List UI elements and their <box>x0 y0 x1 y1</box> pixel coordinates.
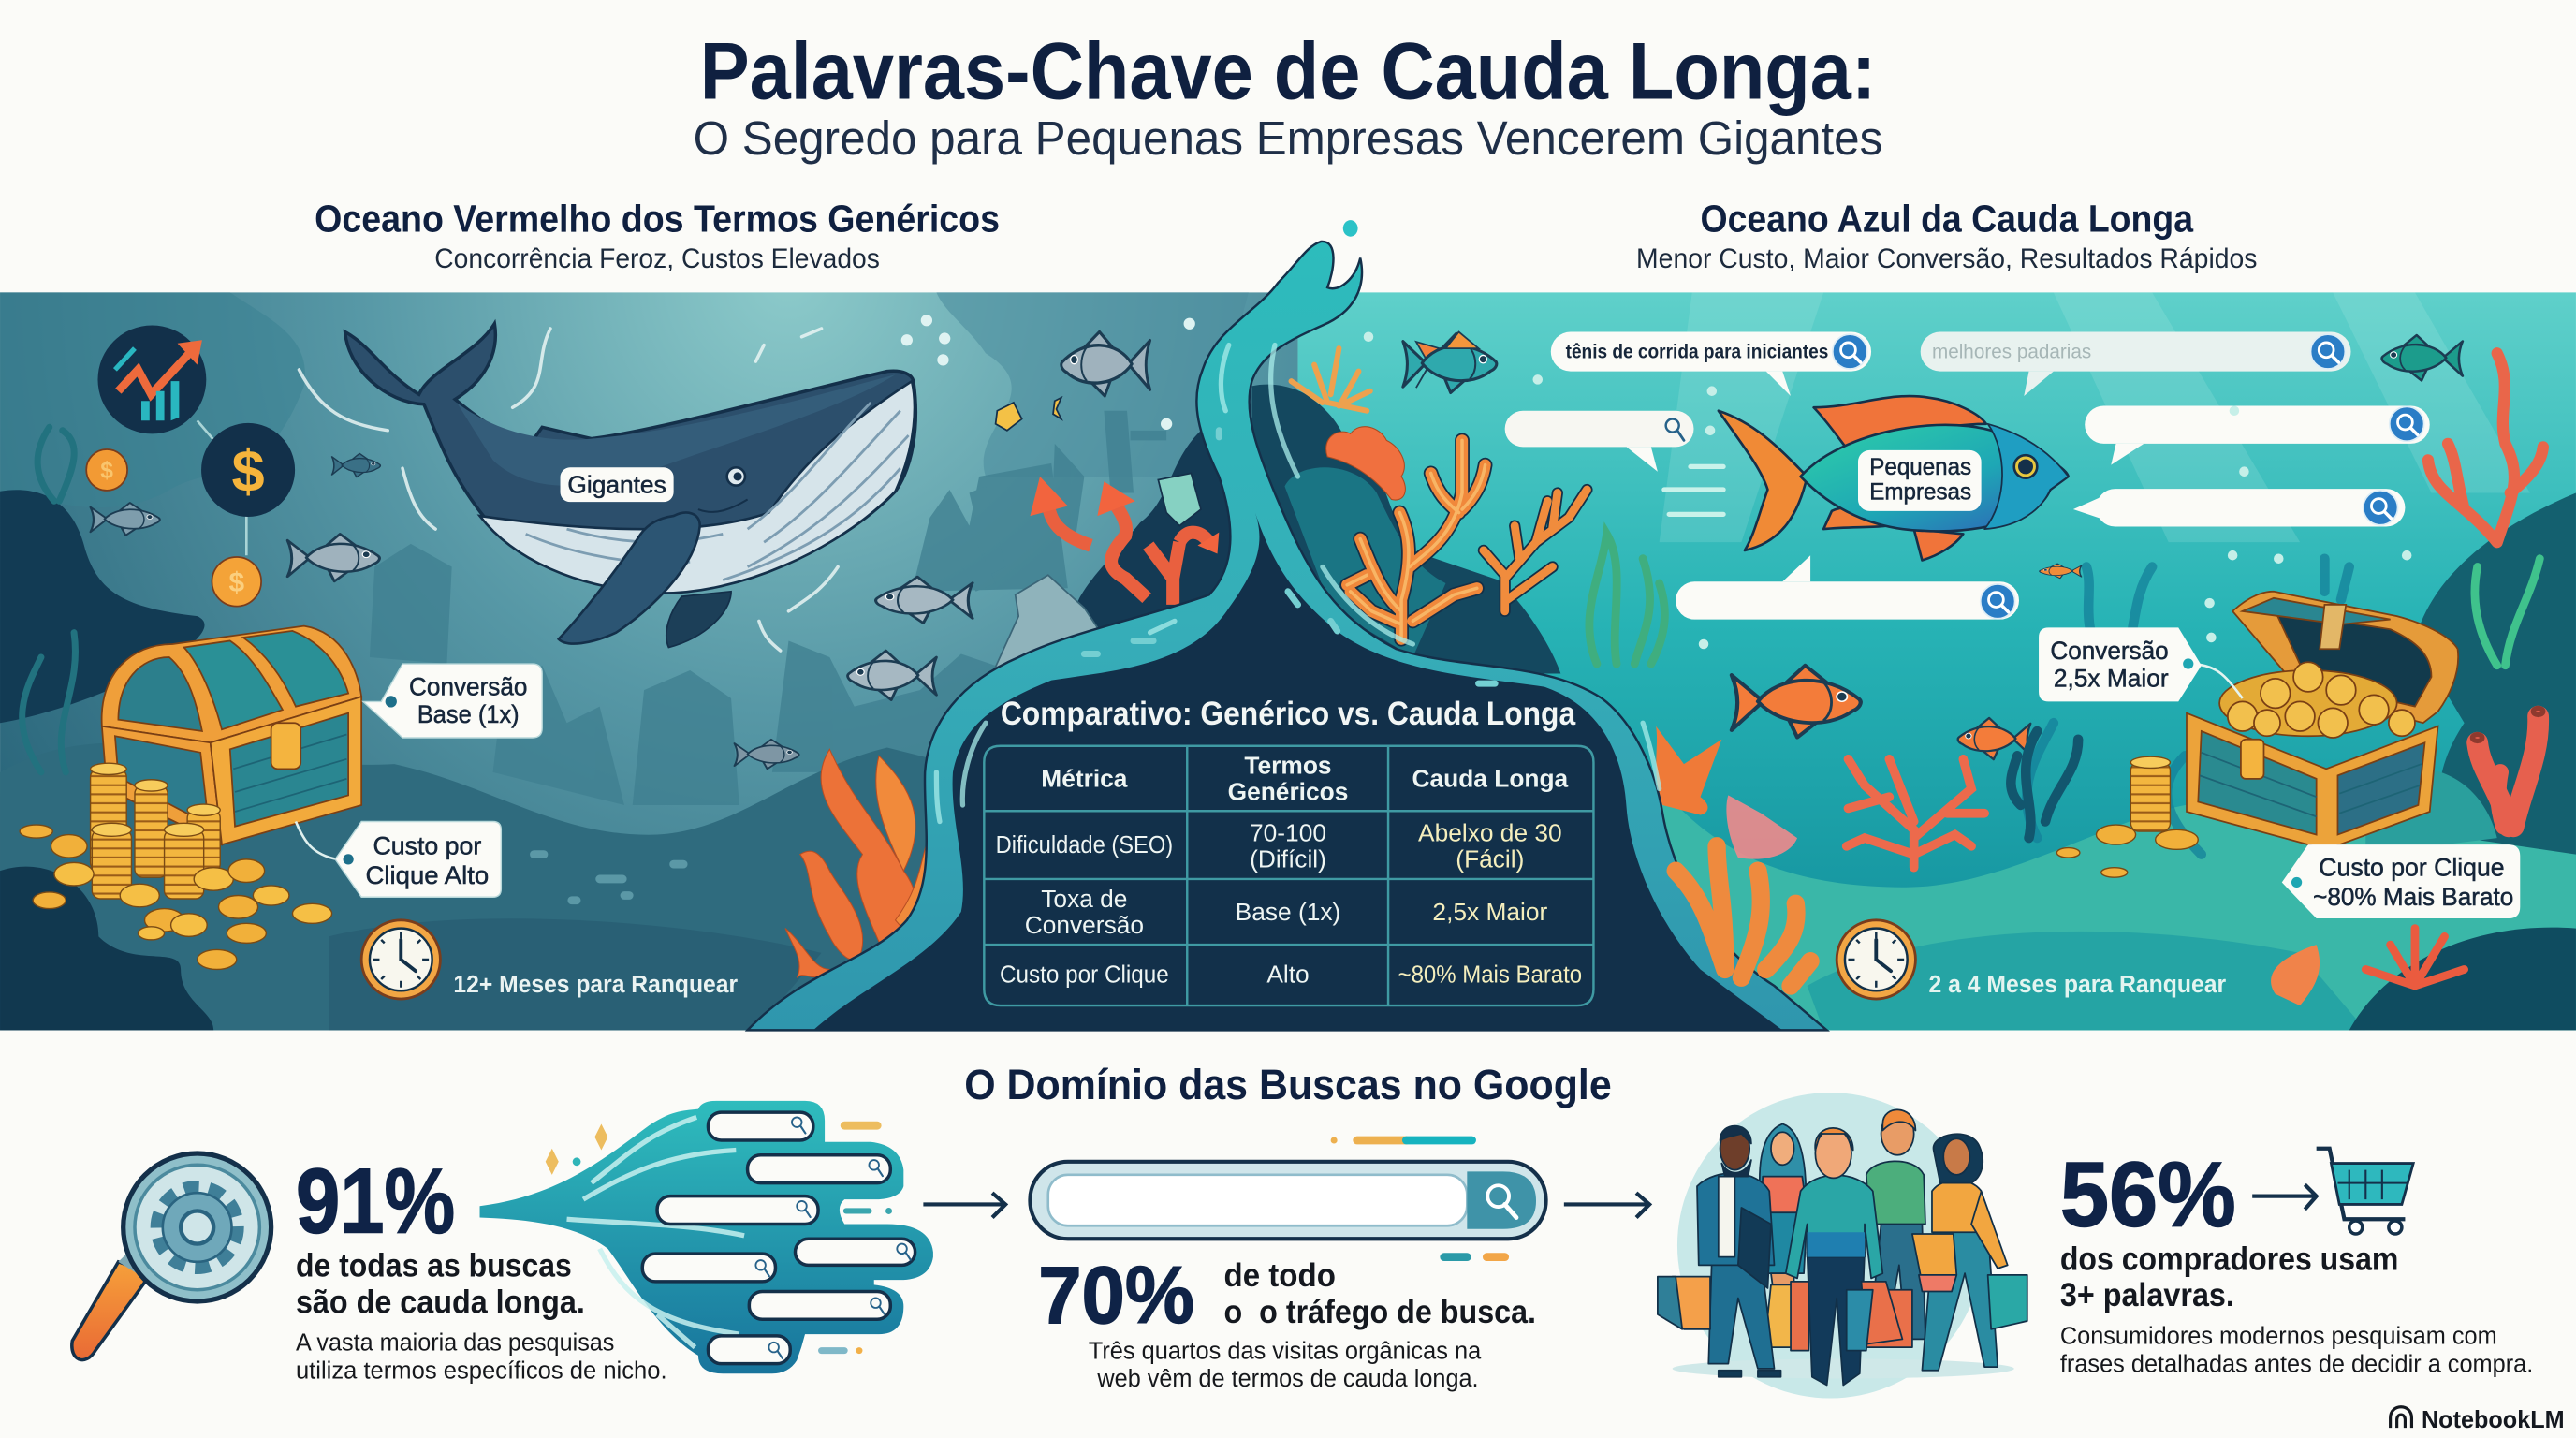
tube sponge <box>2472 708 2543 827</box>
search bar 4 <box>2085 405 2430 465</box>
label: 12+ meses: 12+ Meses para Ranquear <box>453 970 738 998</box>
label: pequenas empresas <box>1858 450 1982 511</box>
icon: coin: $ <box>228 567 244 598</box>
stat description <box>296 1328 667 1384</box>
dark rocks right <box>2415 493 2576 855</box>
title <box>694 26 1882 165</box>
stat heading: dos compradores usam <box>2060 1241 2398 1278</box>
stat heading <box>296 1248 585 1320</box>
small yellow creature <box>996 398 1061 431</box>
bar 2 <box>748 1155 890 1183</box>
shopper 4 <box>1863 1109 1925 1347</box>
stat: 56 percent <box>2060 1142 2533 1377</box>
table title: Comparativo: Genérico vs. Cauda Longa <box>1001 696 1576 732</box>
row: dificuldade: (Fácil) <box>1456 845 1524 873</box>
number 56%: 56% <box>2060 1142 2236 1245</box>
coral bottom right <box>2365 929 2465 986</box>
shopper 3 <box>1786 1128 1902 1385</box>
background ruins <box>370 411 1166 805</box>
label: pequenas empresas: Empresas <box>1869 480 1971 506</box>
pink fan coral <box>1726 795 1797 859</box>
orange coral lower <box>1676 846 1810 986</box>
shoppers illustration <box>1658 1093 2027 1399</box>
water drop <box>1343 220 1358 237</box>
bubbles left <box>907 320 1190 424</box>
orange fan <box>1656 726 1721 814</box>
row: conversão: Conversão <box>1025 911 1144 939</box>
icon: coin <box>212 557 261 607</box>
search bar 3 <box>1505 411 1693 472</box>
row: conversão <box>1025 885 1548 939</box>
panel: blue ocean scene <box>1251 292 2576 1030</box>
icon: growth chart circle <box>97 325 206 433</box>
bottom heading: O Domínio das Buscas no Google <box>964 1061 1612 1108</box>
table header: Termos <box>1244 752 1332 780</box>
subtitle: O Segredo para Pequenas Empresas Vencerem Gigantes <box>694 111 1882 165</box>
callout: custo barato <box>2282 844 2520 918</box>
arrow: search to shoppers <box>1564 1193 1649 1217</box>
row: conversão: 2,5x Maior <box>1432 898 1548 926</box>
central water divider <box>748 220 1827 1030</box>
bar 1 <box>708 1112 813 1140</box>
stat description: frases detalhadas antes de decidir a compra. <box>2060 1349 2533 1377</box>
stat heading: de todo <box>1224 1257 1336 1294</box>
seabed right <box>1649 772 2576 1030</box>
water splash <box>748 242 1827 1030</box>
scallop coral <box>1326 427 1405 500</box>
label: 2 a 4 meses: 2 a 4 Meses para Ranquear <box>1928 970 2226 998</box>
table header: Genéricos <box>1228 778 1348 806</box>
orange fan lower right <box>2271 945 2320 1005</box>
stat description: A vasta maioria das pesquisas <box>296 1328 614 1357</box>
search bar 6 <box>1676 555 2019 620</box>
clock left <box>361 920 440 999</box>
dark center mass <box>813 513 1782 1030</box>
callout: conversão maior: Conversão <box>2050 636 2169 665</box>
number 70%: 70% <box>1038 1251 1194 1341</box>
stat heading: o o tráfego de busca. <box>1224 1294 1536 1330</box>
connector lines <box>198 420 246 555</box>
search bar 2 <box>1921 332 2351 396</box>
water bubbles <box>1084 431 1495 683</box>
clock right <box>1837 920 1915 999</box>
callout: custo barato: Custo por Clique <box>2319 852 2505 881</box>
stat heading <box>1224 1257 1536 1330</box>
callout: conversão maior <box>2039 627 2243 701</box>
dark seaweed <box>2011 731 2078 838</box>
stat description: Três quartos das visitas orgânicas na <box>1089 1336 1482 1364</box>
treasure chest left <box>102 626 361 844</box>
funnel of search bars <box>480 1101 933 1373</box>
white current streaks <box>299 329 838 651</box>
row: dificuldade <box>996 819 1562 873</box>
background silhouettes right <box>2027 559 2349 855</box>
row: custo <box>1000 961 1582 989</box>
callout: conversão base: Base (1x) <box>417 699 520 728</box>
arrow: funnel to search <box>923 1193 1005 1217</box>
heading: blue ocean: Oceano Azul da Cauda Longa <box>1701 197 2194 240</box>
callout: conversão base: Conversão <box>409 671 527 700</box>
heading: blue ocean <box>1636 197 2257 274</box>
stat: 70 percent <box>1030 1137 1546 1392</box>
search bar 2: melhores padarias <box>1932 342 2091 363</box>
number 91%: 91% <box>296 1149 455 1252</box>
stat description <box>2060 1322 2533 1377</box>
stat description: Consumidores modernos pesquisam com <box>2060 1322 2497 1350</box>
rock behind corals <box>1251 385 1560 674</box>
stat heading: 3+ palavras. <box>2060 1277 2234 1313</box>
row: custo: ~80% Mais Barato <box>1398 961 1582 989</box>
stat description: utiliza termos específicos de nicho. <box>296 1356 667 1384</box>
row: dificuldade: Dificuldade (SEO) <box>996 830 1173 858</box>
row: dificuldade: (Difícil) <box>1250 845 1326 873</box>
title: Palavras-Chave de Cauda Longa: <box>700 26 1876 116</box>
seaweed green <box>1589 534 1664 664</box>
coral bottom middle <box>1847 759 1984 868</box>
shopper 2 <box>1760 1123 1808 1351</box>
coins right <box>2056 756 2198 877</box>
callout: custo alto: Clique Alto <box>366 860 489 889</box>
red coral right <box>2428 353 2543 542</box>
table grid <box>984 746 1593 1005</box>
blue ocean subtitle: Menor Custo, Maior Conversão, Resultados Rápidos <box>1636 243 2257 274</box>
coin stacks left <box>20 763 332 969</box>
callout: custo alto <box>296 822 501 897</box>
big fish: pequenas empresas <box>1719 396 2069 560</box>
whale <box>345 324 915 647</box>
treasure chest right <box>2187 592 2458 849</box>
funnel decorations <box>546 1123 892 1354</box>
search bar 5 <box>2073 489 2405 526</box>
coral top <box>1292 348 1370 411</box>
small fish group right <box>1403 332 2463 759</box>
table header <box>1041 752 1569 806</box>
flow arrows <box>567 1117 744 1347</box>
bar 6 <box>749 1291 890 1319</box>
icon: shopping cart <box>2317 1149 2413 1234</box>
row: custo: Custo por Clique <box>1000 961 1169 989</box>
debris bag <box>994 575 1101 670</box>
callout: conversão maior: 2,5x Maior <box>2054 664 2169 693</box>
gray fish group <box>91 332 1150 769</box>
stat heading: de todas as buscas <box>296 1248 572 1284</box>
arrow heads <box>1030 477 1219 553</box>
icon: magnifier gear <box>72 1153 271 1360</box>
row: custo: Alto <box>1266 961 1310 989</box>
bar 3 <box>657 1196 818 1224</box>
red ocean subtitle: Concorrência Feroz, Custos Elevados <box>434 243 880 274</box>
light rays <box>1660 292 2530 542</box>
heading: red ocean: Oceano Vermelho dos Termos Genéricos <box>315 197 1000 240</box>
shopper 5 <box>1912 1134 2027 1371</box>
panel: red ocean scene <box>0 292 1298 1030</box>
seabed <box>0 742 986 1030</box>
large search bar <box>1030 1162 1546 1239</box>
icon: dollar circle: $ <box>231 439 265 505</box>
search bar 1: tênis de corrida para iniciantes <box>1566 342 1828 363</box>
heading: red ocean <box>315 197 1000 274</box>
orange coral 1 <box>1347 440 1486 639</box>
row: conversão: Base (1x) <box>1236 898 1340 926</box>
table header: Cauda Longa <box>1412 765 1569 793</box>
dark rock behind arrows <box>1051 431 1265 657</box>
icon: coin small: $ <box>100 459 113 484</box>
table header: Métrica <box>1041 765 1128 793</box>
search bar 1 <box>1551 332 1871 396</box>
callout: conversão base <box>363 664 542 738</box>
search bar decorations <box>1331 1137 1505 1257</box>
speed lines <box>1664 466 1723 514</box>
icon: coin small <box>86 449 127 491</box>
bubbles right <box>1368 337 2407 644</box>
NotebookLM logo: NotebookLM <box>2422 1407 2565 1433</box>
row: conversão: Toxa de <box>1041 885 1127 913</box>
dark foreground rocks <box>0 490 205 723</box>
label: Gigantes: Gigantes <box>567 473 666 499</box>
callout: custo barato: ~80% Mais Barato <box>2313 882 2513 911</box>
comparison table panel <box>984 696 1593 1005</box>
label: pequenas empresas: Pequenas <box>1869 455 1971 480</box>
stat: 91 percent <box>72 1149 667 1384</box>
red arrows <box>1048 500 1209 605</box>
stat heading <box>2060 1241 2398 1313</box>
stat heading: são de cauda longa. <box>296 1284 585 1320</box>
seaweed left <box>22 427 75 772</box>
bar 4 <box>795 1239 915 1265</box>
arrow to cart <box>2252 1184 2317 1210</box>
small teal creature <box>1158 473 1201 526</box>
row: dificuldade: 70-100 <box>1250 819 1326 847</box>
water highlights <box>936 345 1660 822</box>
callout: custo alto: Custo por <box>373 831 481 860</box>
icon: dollar circle <box>201 423 295 517</box>
orange kelp <box>785 749 937 977</box>
bar 5 <box>642 1254 775 1282</box>
shopper 1 <box>1658 1126 1781 1377</box>
stat description: web vêm de termos de cauda longa. <box>1096 1364 1479 1392</box>
orange coral 2 <box>1484 490 1587 611</box>
label: Gigantes <box>561 467 674 502</box>
row: dificuldade: Abelxo de 30 <box>1418 819 1562 847</box>
bar 7 <box>708 1336 790 1364</box>
green kelp right <box>2475 559 2539 666</box>
pebbles <box>534 855 683 901</box>
stat description <box>1089 1336 1482 1392</box>
